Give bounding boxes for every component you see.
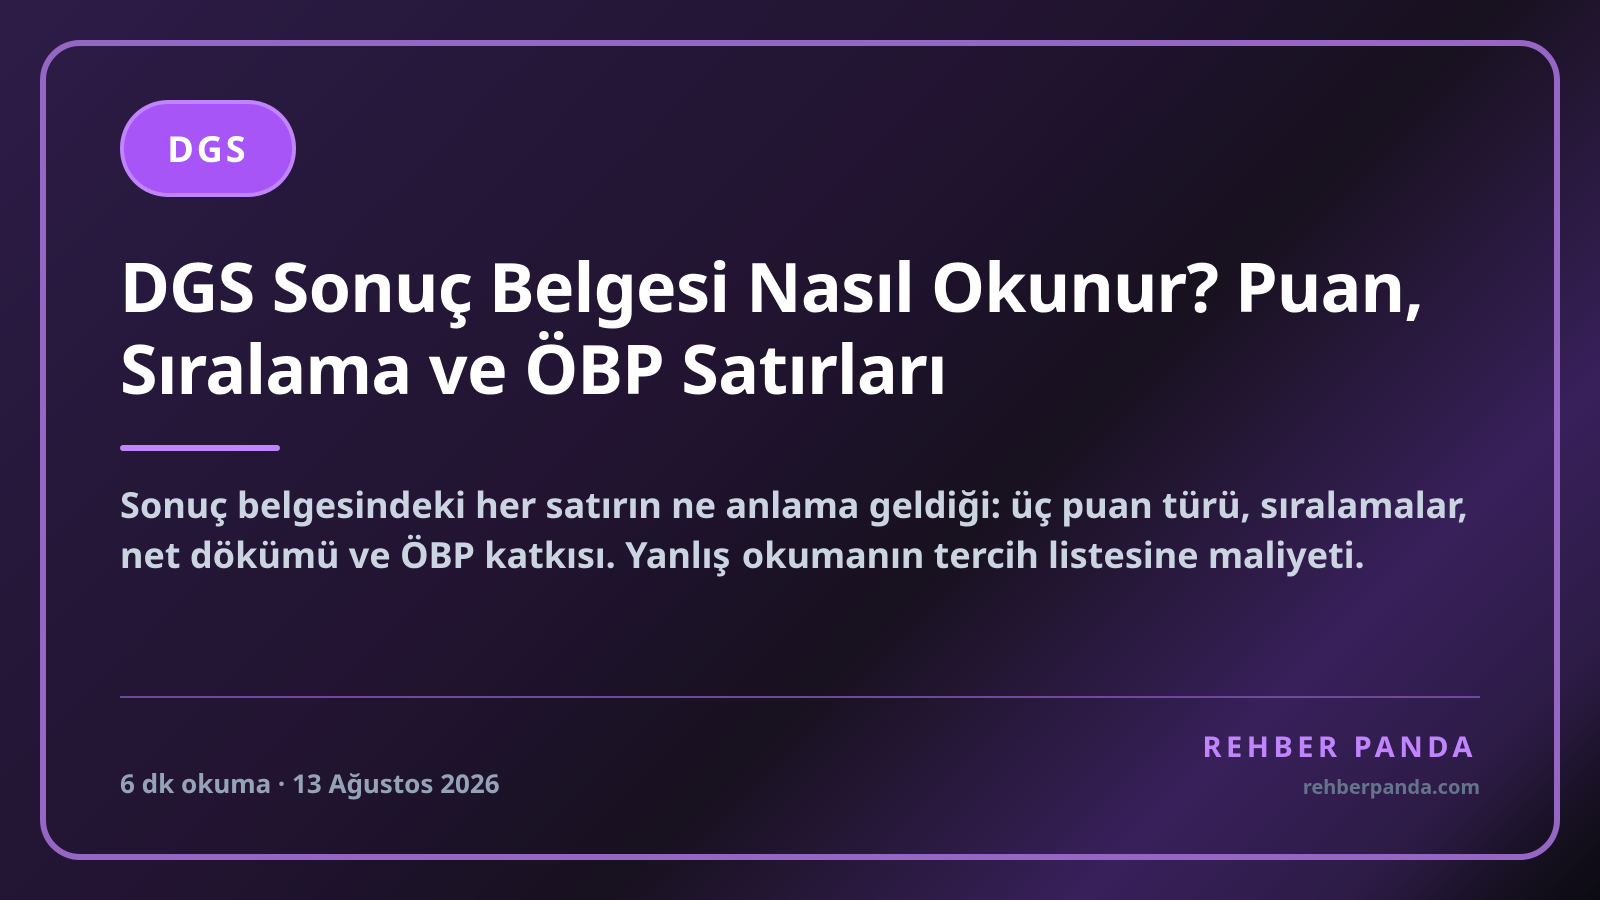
category badge: DGS: [167, 124, 249, 173]
subtitle: [120, 480, 1468, 579]
title: [120, 239, 1423, 414]
reading time and date: 6 dk okuma · 13 Ağustos 2026: [120, 765, 500, 801]
footer divider: [120, 696, 1480, 698]
brand name: REHBER PANDA: [1203, 727, 1477, 766]
title: DGS Sonuç Belgesi Nasıl Okunur? Puan,: [120, 239, 1423, 332]
accent bar: [120, 445, 280, 451]
subtitle: net dökümü ve ÖBP katkısı. Yanlış okumanın tercih listesine maliyeti.: [120, 530, 1365, 579]
title: Sıralama ve ÖBP Satırları: [120, 321, 947, 414]
brand website: rehberpanda.com: [1303, 773, 1480, 800]
subtitle: Sonuç belgesindeki her satırın ne anlama geldiği: üç puan türü, sıralamalar,: [120, 480, 1468, 529]
category badge: [120, 100, 296, 197]
